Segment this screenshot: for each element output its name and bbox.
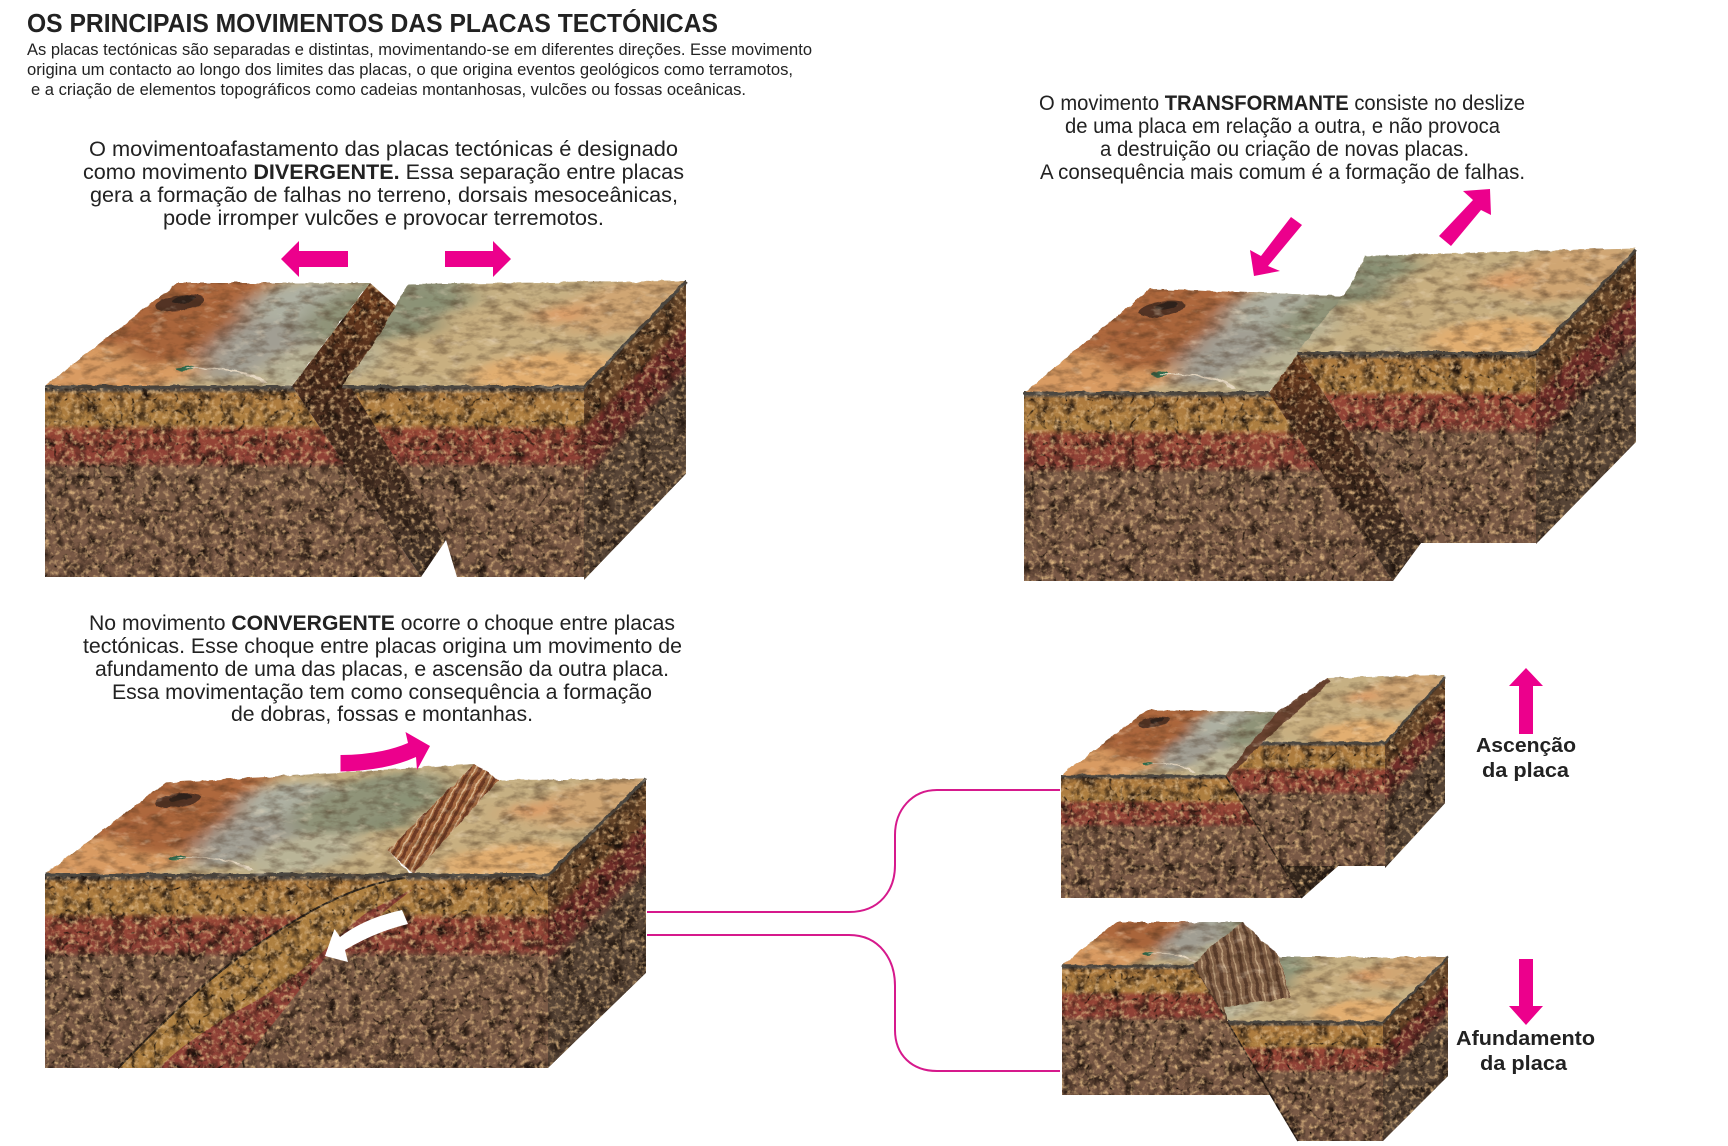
block diagram: plate sinking	[1062, 921, 1449, 1142]
block diagram: convergent	[0, 747, 917, 1068]
intro text: As placas tectónicas são separadas e distintas, movimentando-se em diferentes direções. Esse movimento	[27, 41, 812, 59]
terrain surface	[1062, 921, 1449, 1024]
intro text	[27, 41, 812, 99]
label: ascent: Ascenção	[1476, 734, 1576, 757]
rock faces with subducting slab	[45, 779, 646, 1068]
terrain surface	[1023, 248, 1637, 396]
arrow: convergent curved magenta	[340, 732, 430, 772]
intro text: origina um contacto ao longo dos limites das placas, o que origina eventos geológicos como terramotos,	[27, 61, 793, 79]
terrain surface	[1061, 674, 1446, 778]
text: transform movement: de uma placa em relação a outra, e não provoca	[1065, 115, 1500, 138]
arrow: slab curved white	[325, 910, 408, 962]
arrow: up	[1509, 668, 1543, 734]
rock faces	[1024, 250, 1636, 581]
text: transform movement: a destruição ou criação de novas placas.	[1100, 138, 1469, 161]
text: divergent movement: O movimentoafastamento das placas tectónicas é designado	[89, 138, 678, 161]
label: ascent	[1476, 734, 1576, 782]
rock faces	[45, 280, 686, 580]
text: divergent movement: gera a formação de falhas no terreno, dorsais mesoceânicas,	[90, 184, 678, 207]
text: divergent movement	[83, 138, 684, 230]
intro text: e a criação de elementos topográficos como cadeias montanhosas, vulcões ou fossas oceânicas.	[31, 81, 746, 99]
block diagram: transform	[1023, 248, 1637, 581]
arrow: divergent right	[445, 241, 511, 277]
block diagram: plate ascent	[1061, 674, 1446, 898]
title: OS PRINCIPAIS MOVIMENTOS DAS PLACAS TECTÓNICAS	[27, 8, 718, 38]
terrain surface	[45, 280, 688, 390]
text: convergent movement: tectónicas. Esse choque entre placas origina um movimento de	[83, 635, 682, 658]
text: convergent movement	[83, 612, 682, 726]
text: convergent movement: No movimento CONVERGENTE ocorre o choque entre placas	[89, 612, 675, 635]
label: ascent: da placa	[1482, 759, 1570, 782]
rock faces	[1061, 677, 1445, 898]
arrow: divergent left	[281, 241, 348, 277]
arrow: transform down-left	[1250, 217, 1302, 276]
text: transform movement	[1039, 92, 1525, 184]
label: sinking	[1456, 1027, 1595, 1075]
block diagram: divergent	[0, 241, 968, 580]
text: divergent movement: como movimento DIVERGENTE. Essa separação entre placas	[83, 161, 684, 184]
label: sinking: Afundamento	[1456, 1027, 1595, 1050]
arrow: down	[1509, 959, 1543, 1025]
label: sinking: da placa	[1480, 1052, 1568, 1075]
arrow: transform up-right	[1439, 189, 1491, 246]
connector: sinking	[647, 935, 1060, 1071]
text: convergent movement: de dobras, fossas e montanhas.	[231, 703, 533, 726]
terrain surface	[46, 764, 647, 878]
text: transform movement: A consequência mais comum é a formação de falhas.	[1040, 161, 1525, 184]
rock faces	[1062, 925, 1448, 1141]
text: convergent movement: afundamento de uma das placas, e ascensão da outra placa.	[95, 658, 669, 681]
connector: ascent	[647, 790, 1060, 912]
text: transform movement: O movimento TRANSFORMANTE consiste no deslize	[1039, 92, 1525, 115]
text: divergent movement: pode irromper vulcões e provocar terremotos.	[163, 207, 604, 230]
text: convergent movement: Essa movimentação tem como consequência a formação	[112, 681, 652, 704]
